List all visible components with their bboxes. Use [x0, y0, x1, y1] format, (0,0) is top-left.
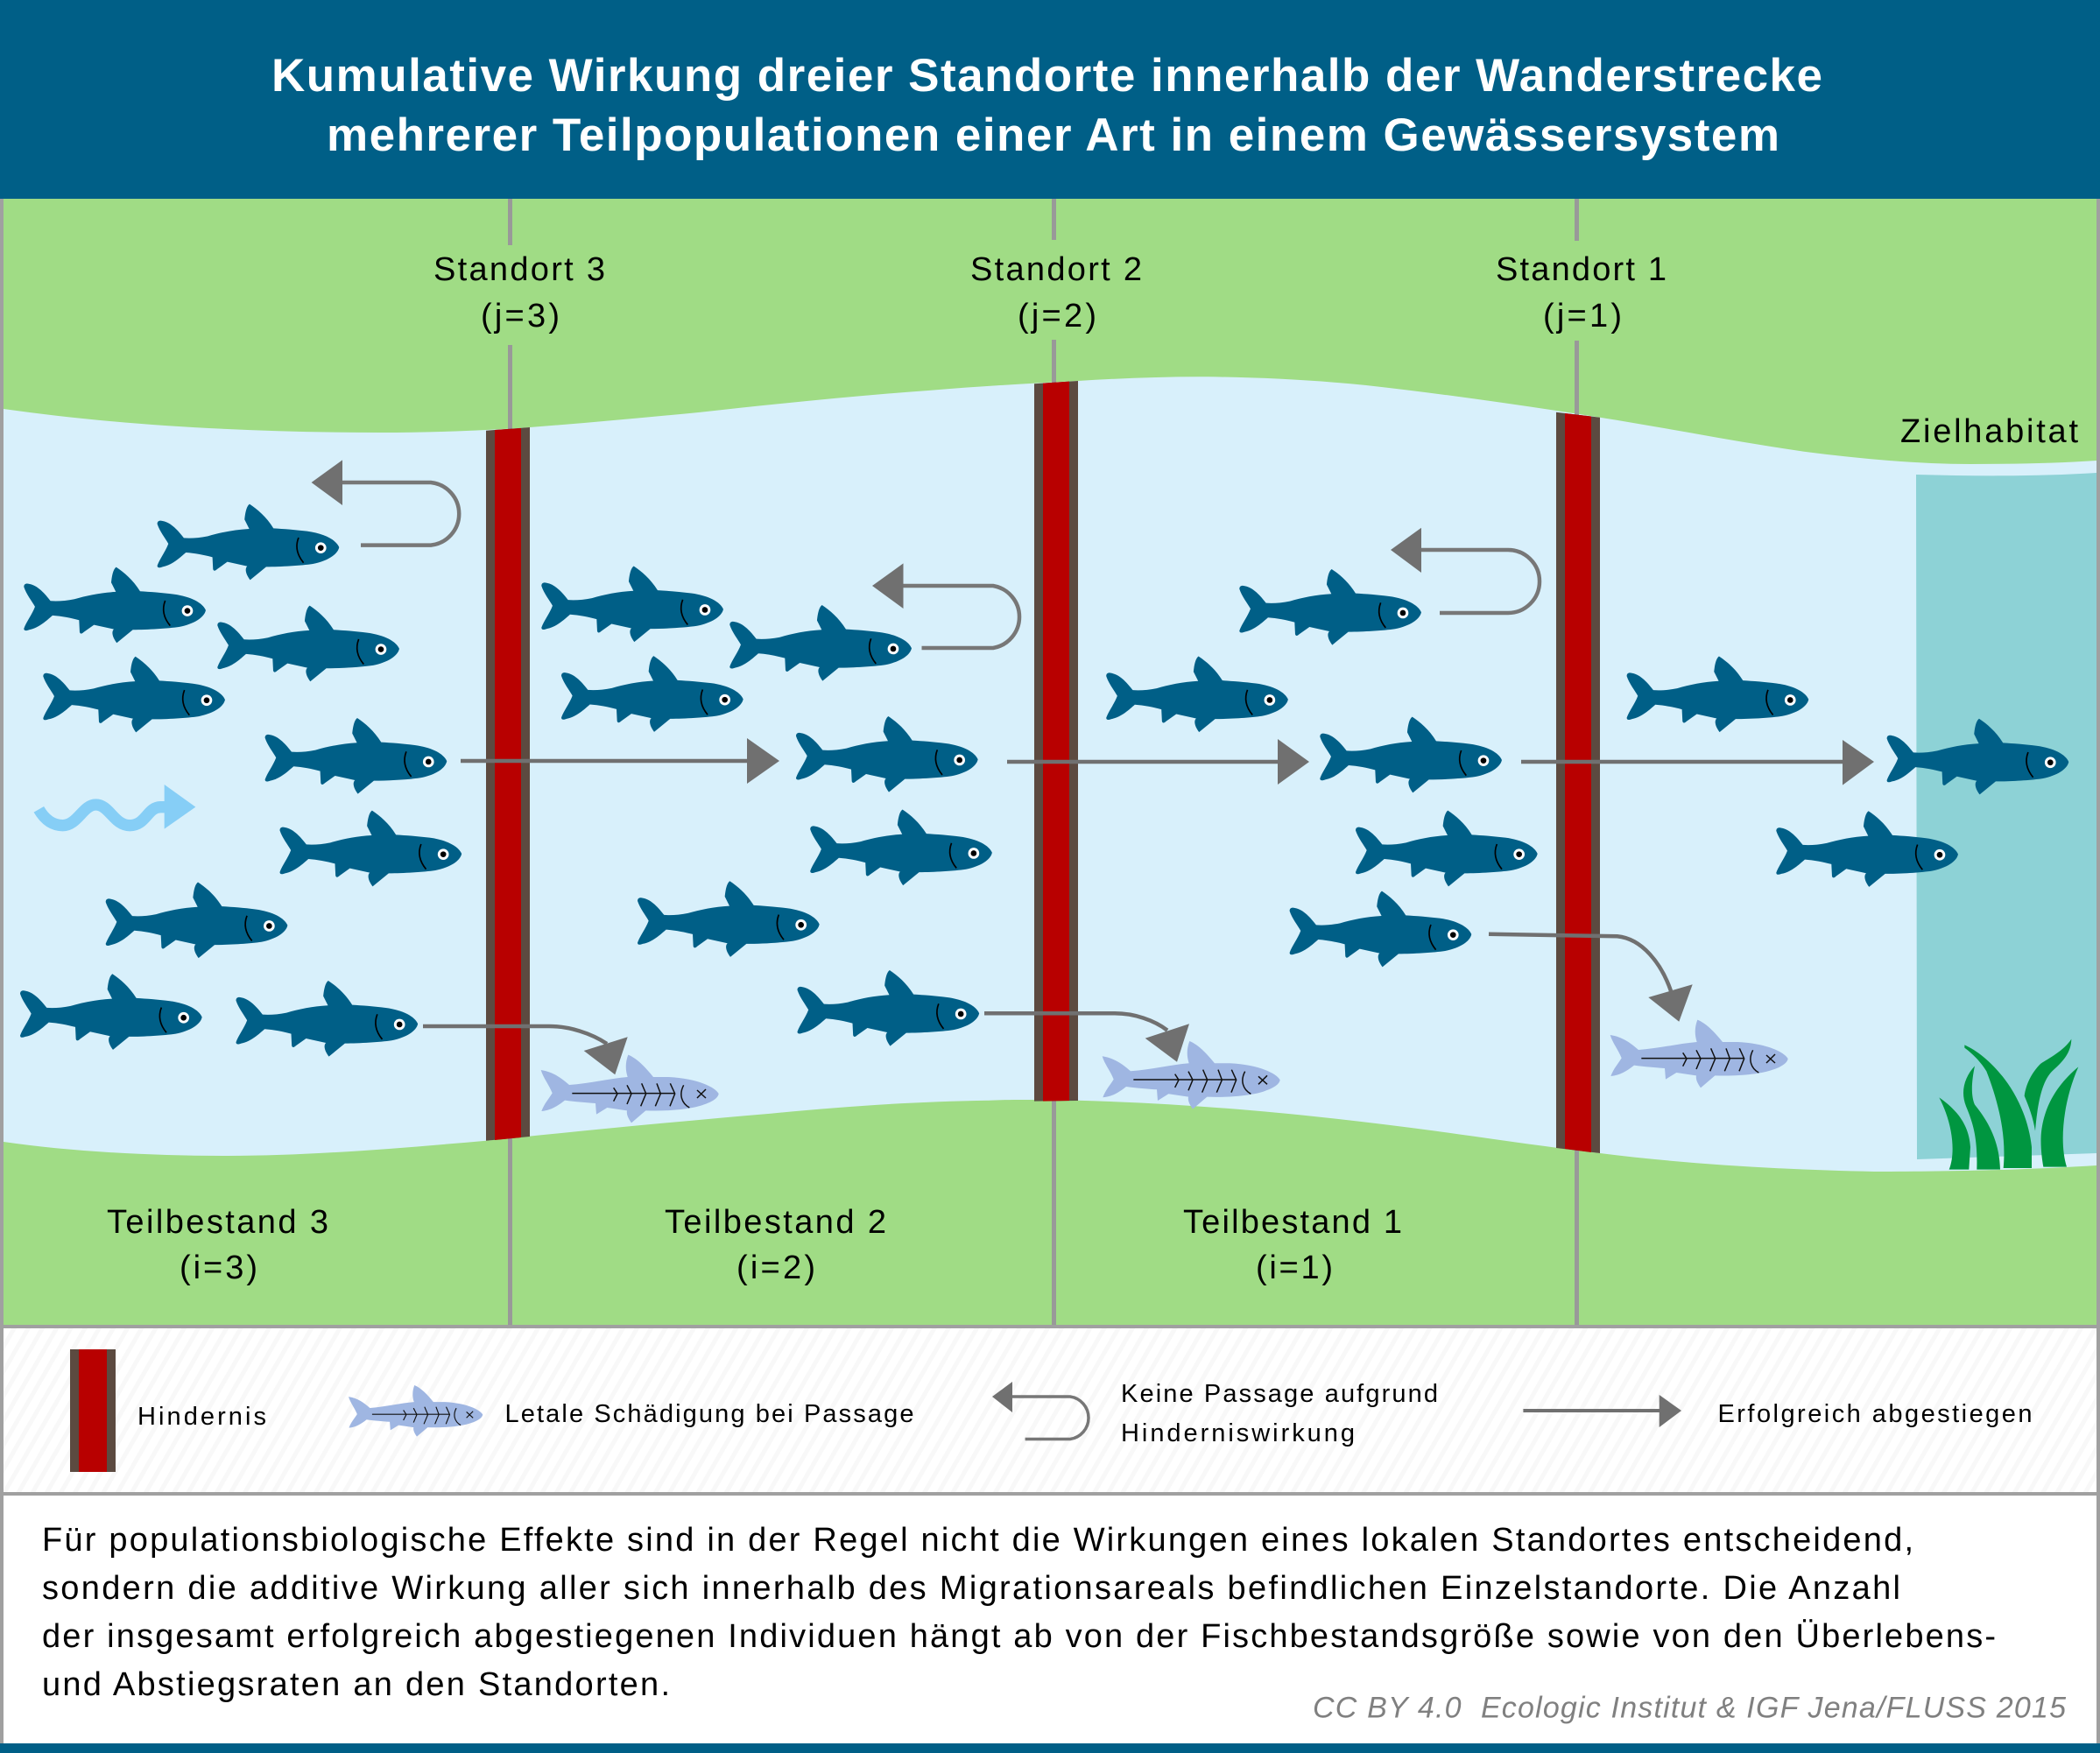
label: Teilbestand 3: Teilbestand 3 [107, 1204, 328, 1241]
fish [158, 504, 339, 580]
header bar [0, 0, 2100, 199]
barrier: Standort 2 [1034, 381, 1078, 1102]
label: Standort 1 [1496, 251, 1667, 334]
target habitat area [1916, 473, 2096, 1159]
text block: explanation: Für populationsbiologische Effekte sind in der Regel nicht die Wirkungen eines lokalen Standortes entscheidend, [42, 1522, 1913, 1559]
fish [279, 811, 462, 886]
footer bar [0, 1743, 2100, 1753]
label: Teilbestand 2: Teilbestand 2 [665, 1204, 886, 1241]
label: Teilbestand 1 [1183, 1204, 1402, 1286]
fish [1627, 656, 1808, 732]
fish [729, 605, 912, 681]
label: Standort 3 [433, 251, 605, 334]
fish [1320, 717, 1502, 792]
fish [24, 567, 206, 643]
label: Teilbestand 3: (i=3) [180, 1250, 257, 1286]
dead fish: Standort 3 [541, 1055, 719, 1123]
legend label: no passage [1121, 1380, 1438, 1447]
fish [236, 981, 418, 1057]
label: Standort 2: Standort 2 [970, 251, 1142, 288]
fish group: Teilbestand 3 [20, 504, 462, 1057]
fish [797, 970, 979, 1046]
fish [1356, 811, 1538, 886]
label: Standort 3: (j=3) [481, 298, 560, 334]
panel: legend [0, 1328, 2100, 1492]
title [271, 50, 1822, 161]
fish [1106, 656, 1288, 732]
fish [43, 657, 225, 732]
label: Teilbestand 1: Teilbestand 1 [1183, 1204, 1402, 1241]
legend label: no passage: Hinderniswirkung [1121, 1419, 1355, 1447]
dead fish: Standort 2 [1103, 1041, 1280, 1109]
text block: explanation: und Abstiegsraten an den Standorten. [42, 1666, 670, 1703]
icon: seaweed [1939, 1039, 2078, 1170]
barrier: Standort 1 [1556, 412, 1600, 1153]
fish [638, 881, 820, 957]
label: Zielhabitat: Zielhabitat [1900, 413, 2078, 450]
title: mehrerer Teilpopulationen einer Art in einem Gewässersystem [327, 109, 1779, 161]
arrow: passed Standort 1 [1521, 740, 1874, 785]
fish [810, 809, 992, 885]
fish [20, 974, 202, 1050]
text block: explanation [42, 1522, 1996, 1703]
dead fish: Standort 1 [1610, 1020, 1788, 1088]
label: Standort 2: (j=2) [1018, 298, 1096, 334]
arrow: lethal passage Standort 1 [1489, 934, 1693, 1022]
fish [1290, 891, 1471, 967]
fish group: Teilbestand 1 [1106, 569, 1538, 967]
legend icon: turn-back arrow [992, 1382, 1089, 1440]
label: Teilbestand 3 [107, 1204, 328, 1286]
panel: river diagram [0, 199, 2100, 1325]
label: Standort 1: (j=1) [1543, 298, 1622, 334]
arrow: lethal passage Standort 2 [984, 1013, 1189, 1062]
fish group: Teilbestand 2 [541, 566, 992, 1046]
label: Teilbestand 1: (i=1) [1256, 1250, 1333, 1286]
fish [796, 716, 978, 792]
text block: explanation: sondern die additive Wirkung aller sich innerhalb des Migrationsareals befindlichen Einzelstandorte. Die Anzahl [42, 1570, 1900, 1607]
legend label: successfully descended: Erfolgreich abgestiegen [1718, 1400, 2032, 1428]
legend icon: obstacle [70, 1349, 116, 1472]
legend icon: straight arrow [1523, 1395, 1681, 1427]
arrow: passed Standort 3 [461, 738, 779, 784]
label: Standort 2 [970, 251, 1142, 334]
title: Kumulative Wirkung dreier Standorte innerhalb der Wanderstrecke [271, 50, 1822, 102]
fish [561, 656, 743, 732]
arrow: turned back at Standort 1 [1391, 528, 1540, 613]
legend label: Hindernis: Hindernis [137, 1403, 266, 1431]
arrow: passed Standort 2 [1007, 739, 1309, 785]
fish [265, 718, 447, 794]
label: Teilbestand 2 [665, 1204, 886, 1286]
legend label: no passage: Keine Passage aufgrund [1121, 1380, 1438, 1408]
fish [217, 606, 399, 681]
land: river banks [0, 199, 2100, 1325]
label: Standort 3: Standort 3 [433, 251, 605, 288]
legend label: lethal damage: Letale Schädigung bei Passage [504, 1400, 914, 1428]
fish [1776, 811, 1958, 887]
river water [4, 377, 2096, 1172]
barrier: Standort 3 [486, 427, 530, 1141]
fish [1239, 569, 1421, 645]
arrow: turned back at Standort 2 [872, 563, 1019, 648]
credit line: CC BY 4.0 Ecologic Institut & IGF Jena/FLUSS 2015 [1313, 1692, 2066, 1725]
section divider lines [508, 199, 1579, 1325]
fish [1887, 719, 2068, 794]
legend background [0, 1328, 2100, 1492]
text block: explanation: der insgesamt erfolgreich abgestiegenen Individuen hängt ab von der Fischbestandsgröße sowie von den Überlebens- [42, 1618, 1996, 1655]
arrow: lethal passage Standort 3 [423, 1026, 628, 1074]
legend icon: dead fish [349, 1385, 483, 1437]
fish [541, 566, 723, 642]
icon: flow direction arrow [39, 785, 195, 829]
label: Standort 1: Standort 1 [1496, 251, 1667, 288]
fish [106, 882, 287, 958]
label: Teilbestand 2: (i=2) [736, 1250, 815, 1286]
fish group: past Standort 1 [1627, 656, 2068, 887]
arrow: turned back at Standort 3 [312, 460, 459, 546]
